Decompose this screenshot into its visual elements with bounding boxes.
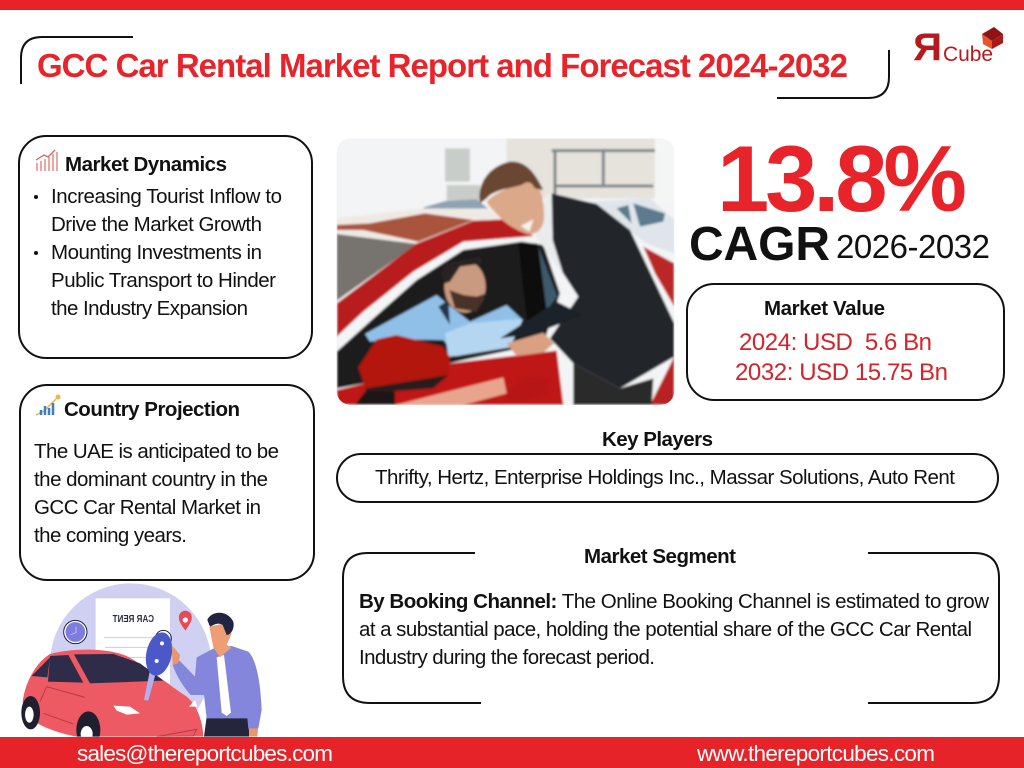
panel: country projection: The UAE is anticipated to be xyxy=(34,440,279,463)
panel: market dynamics: Increasing Tourist Inflow to xyxy=(51,185,282,208)
panel: key players: Key Players xyxy=(602,428,713,451)
panel: key players: Thrifty, Hertz, Enterprise Holdings Inc., Massar Solutions, Auto Rent xyxy=(375,466,955,489)
logo: R xyxy=(913,26,942,69)
panel: market segment xyxy=(343,545,999,703)
illustration: car rental agent with key: CAR RENT xyxy=(113,614,154,625)
photo: salesman and customer in red car xyxy=(330,130,683,410)
panel: market segment: Industry during the forecast period. xyxy=(359,646,655,669)
panel: market dynamics: Market Dynamics xyxy=(65,153,227,176)
panel: market value: 2032: USD 15.75 Bn xyxy=(735,359,948,386)
CAGR figure: 2026-2032 xyxy=(836,228,990,265)
panel: market dynamics: Drive the Market Growth xyxy=(51,213,262,236)
icon: growth chart xyxy=(36,150,57,171)
panel: country projection: Country Projection xyxy=(64,398,240,421)
panel: market dynamics: the Industry Expansion xyxy=(51,297,248,320)
panel: key players xyxy=(337,428,998,502)
CAGR figure: 13.8% xyxy=(717,126,967,231)
panel: market value xyxy=(687,284,1004,400)
panel: market segment: By Booking Channel: The Online Booking Channel is estimated to grow xyxy=(359,590,989,613)
illustration: car rental agent with key xyxy=(21,583,262,749)
panel: country projection: the dominant country in the xyxy=(34,468,268,491)
CAGR figure xyxy=(689,126,990,271)
panel: market dynamics: Mounting Investments in xyxy=(51,241,262,264)
footer bar xyxy=(0,737,1024,768)
logo: Cube xyxy=(943,43,993,66)
panel: market value: Market Value xyxy=(764,297,885,320)
panel: market segment: at a substantial pace, holding the potential share of the GCC Car Rental xyxy=(359,618,972,641)
panel: country projection: the coming years. xyxy=(34,524,187,547)
footer bar: sales@thereportcubes.com xyxy=(77,741,333,766)
logo xyxy=(913,26,1003,69)
panel: market dynamics: Public Transport to Hinder xyxy=(51,269,276,292)
top bar xyxy=(0,0,1024,10)
panel: country projection xyxy=(20,385,314,580)
footer bar: www.thereportcubes.com xyxy=(696,741,935,766)
panel: country projection: GCC Car Rental Market in xyxy=(34,496,261,519)
title xyxy=(21,37,889,98)
icon: country growth chart xyxy=(36,394,60,415)
panel: market value: 2024: USD 5.6 Bn xyxy=(739,329,932,356)
CAGR figure: CAGR xyxy=(689,218,830,271)
title: GCC Car Rental Market Report and Forecast 2024-2032 xyxy=(37,47,848,84)
panel: market dynamics xyxy=(19,136,312,358)
panel: market segment: Market Segment xyxy=(584,545,736,568)
